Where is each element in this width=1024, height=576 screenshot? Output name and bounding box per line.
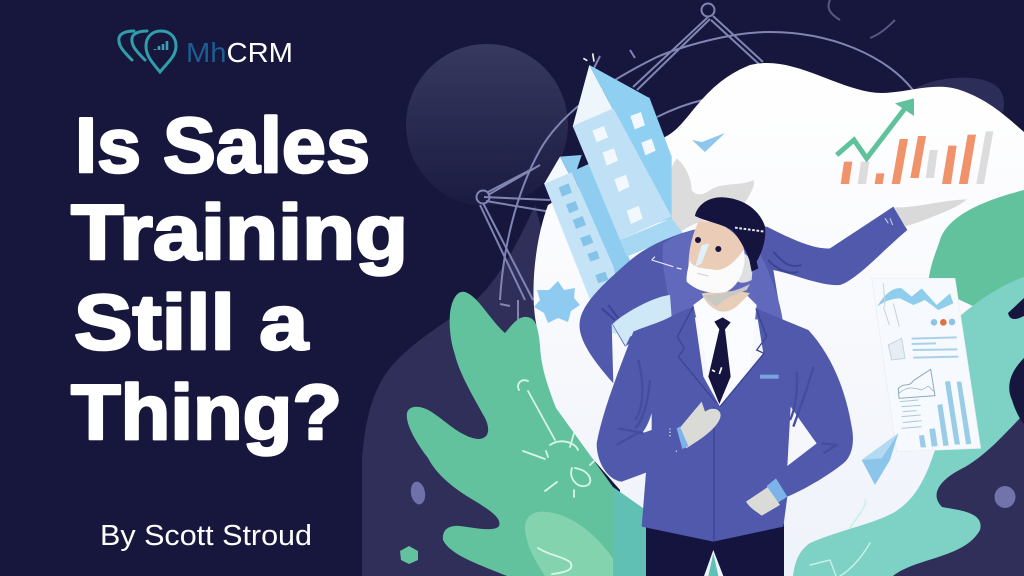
green leaf (407, 292, 640, 576)
logo text: MhCRM (186, 37, 293, 68)
background circle (406, 44, 568, 206)
beard (687, 249, 745, 293)
title: Is Sales (75, 101, 370, 189)
oval dot right (994, 486, 1016, 508)
green arrow (837, 108, 905, 158)
lapels (677, 307, 767, 407)
teal gap between legs (708, 553, 718, 576)
icon: gear (534, 281, 580, 323)
outline chart (898, 369, 935, 398)
pocket cuff (767, 478, 787, 502)
white gap right of waist (787, 407, 817, 466)
paper plane (862, 433, 898, 485)
dots (931, 319, 937, 326)
oval dot left (409, 480, 427, 506)
byline: By Scott Stroud (100, 520, 312, 552)
lower doodle (810, 500, 870, 576)
pocket square (760, 375, 779, 379)
cuff doodle (885, 218, 893, 225)
jacket folds (617, 360, 838, 453)
jacket (597, 307, 853, 542)
hair (695, 197, 765, 272)
face (688, 221, 747, 280)
chest hand (679, 402, 721, 448)
trousers (646, 523, 784, 576)
gray cloud (651, 159, 679, 187)
teal blob (613, 487, 660, 576)
small sketch (888, 338, 905, 360)
leaf doodle (518, 380, 594, 574)
chest cuff (677, 427, 688, 449)
line chart area (877, 288, 953, 310)
arm hole showing building (613, 295, 672, 346)
green blob right (928, 190, 1024, 330)
logo (119, 31, 293, 72)
icon: light blue check (692, 133, 725, 152)
wireframe lines (476, 0, 913, 348)
man (579, 197, 967, 576)
shirt (693, 295, 757, 403)
title: Still a (74, 278, 309, 366)
icon: buildings (544, 53, 754, 333)
main tower (573, 65, 613, 127)
navy notches right edge (1008, 298, 1024, 424)
title: Thing? (71, 368, 342, 456)
paper with charts (872, 278, 981, 452)
cloud behind white blob (913, 78, 1004, 112)
eyes (695, 237, 701, 243)
title: Training (71, 188, 408, 276)
bars (841, 135, 976, 184)
raised arm (579, 207, 907, 383)
dark blob left (362, 205, 620, 576)
chart speech bubble and chart (837, 98, 993, 184)
hexagon dot (400, 546, 418, 564)
lighter inner sleeve (663, 228, 783, 320)
neck (702, 291, 750, 312)
lower tower (544, 172, 623, 333)
dark blob lower right (893, 414, 1024, 576)
arm folds (602, 252, 802, 320)
white gap left of waist (642, 413, 652, 433)
ear (735, 252, 753, 283)
light green leaf patch (525, 512, 622, 576)
text lines (912, 337, 958, 358)
raised hand (894, 199, 967, 227)
title (71, 101, 408, 456)
pocket hand (746, 487, 780, 516)
bars (919, 381, 971, 447)
logo pins (119, 31, 176, 72)
teal blob right (793, 277, 1024, 576)
white blob (533, 63, 1024, 576)
tie (708, 317, 731, 404)
nose highlight (695, 243, 709, 267)
